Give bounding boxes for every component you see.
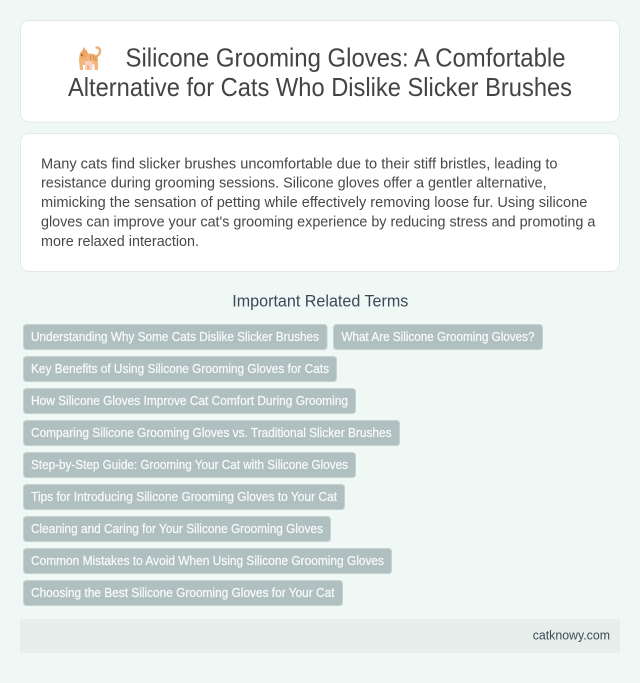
tag 3: Key Benefits of Using Silicone Grooming Gloves for Cats [31,362,329,376]
tag 7 [24,484,344,510]
tag 8 [24,516,330,542]
panel: title card [20,20,620,122]
tag 1: Understanding Why Some Cats Dislike Slicker Brushes [31,330,319,344]
tag 10: Choosing the Best Silicone Grooming Gloves for Your Cat [31,586,335,600]
tag 9: Common Mistakes to Avoid When Using Silicone Grooming Gloves [31,554,384,568]
title text: Silicone Grooming Gloves: A Comfortable [126,44,566,72]
tag 2 [334,324,542,350]
related terms tags [24,324,542,606]
tag 6: Step-by-Step Guide: Grooming Your Cat with Silicone Gloves [31,458,348,472]
intro paragraph [41,155,596,250]
tag 7: Tips for Introducing Silicone Grooming Gloves to Your Cat [31,490,337,504]
panel: introduction [20,134,620,272]
tag 4 [24,388,356,414]
title text [68,44,572,102]
tag 9 [24,548,392,574]
tag 4: How Silicone Gloves Improve Cat Comfort During Grooming [31,394,348,408]
tag 8: Cleaning and Caring for Your Silicone Grooming Gloves [31,522,323,536]
tag 5: Comparing Silicone Grooming Gloves vs. Traditional Slicker Brushes [31,426,392,440]
tag 2: What Are Silicone Grooming Gloves? [342,330,534,344]
intro paragraph: more relaxed interaction. [41,233,199,250]
intro paragraph: resistance during grooming sessions. Silicone gloves offer a gentler alternative, [41,175,547,192]
tag 3 [24,356,336,382]
intro paragraph: gloves can improve your cat's grooming experience by reducing stress and promoting a [41,214,596,231]
footer [20,619,620,653]
tag 10 [24,580,342,606]
tag 5 [24,420,400,446]
intro paragraph: Many cats find slicker brushes uncomfortable due to their stiff bristles, leading to [41,155,558,172]
icon: orange cat [79,47,100,70]
tag 6 [24,452,356,478]
intro paragraph: mimicking the sensation of petting while effectively removing loose fur. Using silicone [41,194,587,211]
footer source text: catknowy.com [533,628,610,643]
title text: Alternative for Cats Who Dislike Slicker Brushes [68,74,572,102]
tag 1 [24,324,327,350]
heading: important related terms: Important Related Terms [232,292,408,311]
